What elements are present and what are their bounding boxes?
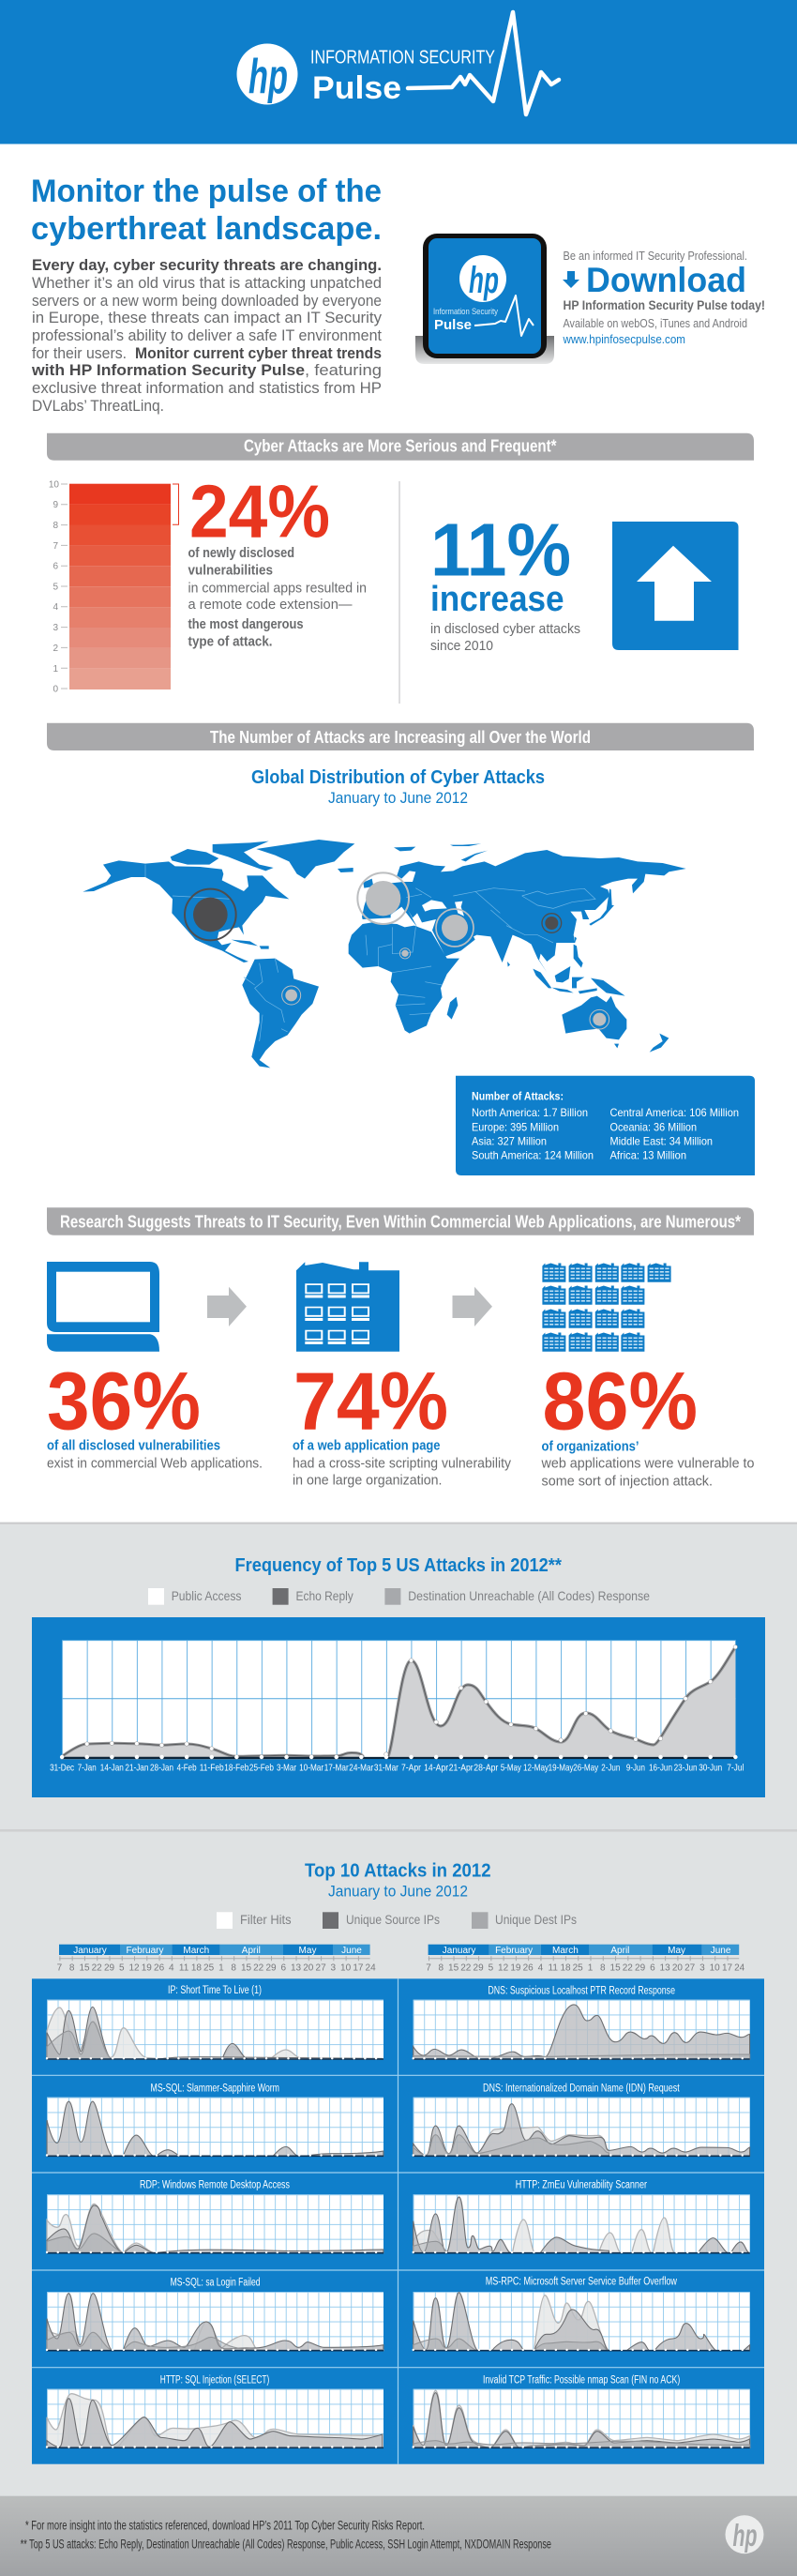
stat: 86 percent: some sort of injection attack. [542,1474,713,1489]
timeline: right column: April [610,1946,629,1956]
chart: HTTP SQL Injection [47,2375,383,2447]
timeline: left column: 5 [119,1963,125,1974]
download call to action [563,250,765,346]
stat: 36 percent: of all disclosed vulnerabilities [47,1439,220,1454]
legend: number of attacks [456,1076,755,1175]
timeline: left column: 24 [366,1963,376,1974]
chart: DNS Suspicious Localhost [414,1986,750,2059]
chart: MS-SQL Slammer-Sapphire Worm: MS-SQL: Slammer-Sapphire Worm [150,2083,279,2094]
stat: 24 percent: 24% [189,469,330,553]
date axis labels: 7-Jan [78,1763,97,1774]
timeline: left column [57,1945,376,1974]
map heading: January to June 2012 [328,789,468,807]
frequency line chart [32,1617,765,1797]
stat: 74 percent: 74% [293,1356,448,1447]
intro text block: Whether it’s an old virus that is attacking unpatched [32,274,382,292]
timeline: left column: April [242,1946,261,1956]
timeline: right column: 15 [448,1963,459,1974]
date axis labels: 21-Apr [449,1763,474,1774]
date axis labels: 3-Mar [277,1763,296,1774]
chart: HTTP ZmEu Vulnerability Scanner [414,2180,750,2253]
chart: Invalid TCP Traffic: Invalid TCP Traffic: Possible nmap Scan (FIN no ACK) [483,2375,680,2387]
date axis labels: 21-Jan [125,1763,149,1774]
top 10 attacks heading: Top 10 Attacks in 2012 [305,1861,491,1882]
top 10 attacks heading [305,1861,491,1901]
marker: South America [282,986,301,1005]
panel: top 10 charts [32,1978,764,2464]
date axis labels: 11-Feb [200,1763,224,1774]
stat: 24 percent: vulnerabilities [188,563,273,579]
stat: 24 percent: a remote code extension— [188,597,353,613]
date axis labels: 30-Jun [699,1763,722,1774]
timeline: left column: 11 [179,1963,189,1974]
stat: 36 percent: exist in commercial Web applications. [47,1457,263,1472]
date axis labels: 17-Mar [324,1763,349,1774]
legend: number of attacks: Number of Attacks: [472,1092,564,1103]
intro text block: for their users. [32,344,127,362]
date axis labels: 7-Jul [727,1763,744,1774]
icon: computer [47,1262,159,1352]
app icon: Pulse [434,317,472,333]
legend: number of attacks: South America: 124 Million [472,1149,594,1162]
arrow [207,1287,247,1326]
app icon [415,234,554,364]
timeline: right column: 17 [722,1963,732,1974]
bar chart: vulnerability severity: 1 [53,664,58,674]
marker: Middle East [436,909,474,947]
timeline: right column: 8 [439,1963,444,1974]
timeline: right column: 27 [684,1963,696,1974]
chart: DNS Suspicious Localhost: DNS: Suspicious Localhost PTR Record Response [488,1986,675,1997]
intro text block: in Europe, these threats can impact an IT Security [32,309,382,326]
timeline: right column: 5 [489,1963,494,1974]
timeline: right column: May [668,1946,685,1956]
timeline: left column: 26 [154,1963,165,1974]
timeline: left column: 12 [128,1963,140,1974]
date axis labels: 12-May [523,1763,549,1774]
intro text block: DVLabs’ ThreatLinq. [32,397,164,415]
Europe, Africa, Asia and Oceania [349,843,686,1053]
brand name: INFORMATION SECURITY [310,48,495,68]
timeline: left column: 29 [104,1963,114,1974]
stat: 86 percent [541,1356,754,1489]
date axis labels: 14-Apr [424,1763,449,1774]
frequency chart legend: Echo Reply [296,1588,353,1603]
date axis labels: 31-Mar [374,1763,398,1774]
map heading: Global Distribution of Cyber Attacks [251,767,545,788]
legend: number of attacks: Asia: 327 Million [472,1135,547,1148]
date axis labels: 2-Jun [601,1763,620,1774]
bar chart: vulnerability severity: 0 [53,685,58,694]
marker: Oceania [590,1009,609,1029]
timeline: left column: 7 [57,1963,63,1974]
timeline: left column: 22 [92,1963,102,1974]
timeline: left column: 4 [169,1963,174,1974]
stat: 86 percent: 86% [542,1356,698,1447]
date axis labels: 31-Dec [50,1763,74,1774]
timeline: left column: 19 [142,1963,152,1974]
timeline: right column: 22 [623,1963,633,1974]
chart: RDP Windows Remote Desktop Access: RDP: Windows Remote Desktop Access [140,2180,290,2191]
intro text block [31,256,382,415]
download call to action: Available on webOS, iTunes and Android [563,317,747,330]
header band [0,0,797,144]
date axis labels: 28-Jan [150,1763,173,1774]
timeline: right column: 25 [573,1963,583,1974]
download call to action: HP Information Security Pulse today! [563,298,765,312]
timeline: right column: 12 [498,1963,509,1974]
timeline: left column: 25 [203,1963,215,1974]
timeline: left column: 22 [253,1963,264,1974]
timeline: left column: May [299,1946,316,1956]
timeline: left column: January [73,1946,107,1956]
app icon: hp [469,260,499,301]
chart: HTTP ZmEu Vulnerability Scanner: HTTP: ZmEu Vulnerability Scanner [516,2180,647,2191]
date axis labels: 10-Mar [299,1763,323,1774]
timeline: left column: 15 [241,1963,251,1974]
chart: MS-SQL sa Login Failed [47,2278,383,2351]
marker: Europe [357,872,409,924]
timeline: left column: 29 [265,1963,277,1974]
stat: 86 percent: web applications were vulnerable to [541,1457,754,1472]
legend: number of attacks: Central America: 106 Million [609,1106,739,1119]
timeline: left column: 17 [353,1963,364,1974]
timeline: right column: 1 [588,1963,594,1974]
timeline: right column: 29 [635,1963,646,1974]
timeline: left column: 13 [291,1963,301,1974]
chart: MS-SQL Slammer-Sapphire Worm [47,2083,383,2156]
section bar: attacks over the world [47,723,754,750]
marker: Asia [542,914,562,932]
timeline: left column: February [126,1946,164,1956]
footnote: ** Top 5 US attacks: Echo Reply, Destination Unreachable (All Codes) Response, Public Access, SSH Login Attempt, NXDOMAIN Response [21,2538,551,2552]
footer [0,2496,797,2576]
app icon: Information Security [433,307,498,317]
intro text block: professional’s ability to deliver a safe IT environment [32,326,382,344]
data series [62,1647,735,1758]
chart: HTTP SQL Injection: HTTP: SQL Injection (SELECT) [160,2375,269,2387]
timeline: right column: 18 [560,1963,571,1974]
bar chart: vulnerability severity: 8 [53,521,58,531]
date axis labels: 7-Apr [401,1763,421,1774]
timeline: left column: 27 [316,1963,326,1974]
section bar: serious and frequent [47,433,754,461]
date axis labels: 26-May [573,1763,599,1774]
frequency chart heading: Frequency of Top 5 US Attacks in 2012** [234,1555,562,1576]
timeline: right column: 3 [699,1963,705,1974]
timeline: right column: 8 [600,1963,606,1974]
date axis labels: 19-May [549,1763,574,1774]
timeline: left column: 18 [191,1963,202,1974]
date axis labels: 16-Jun [649,1763,672,1774]
timeline: left column: 15 [79,1963,90,1974]
pulse line [408,12,559,114]
chart: DNS Internationalized Domain Name [414,2083,750,2156]
stat: 36 percent: 36% [47,1356,201,1447]
chart: DNS Internationalized Domain Name: DNS: Internationalized Domain Name (IDN) Request [483,2083,680,2094]
timeline: left column: March [183,1946,209,1956]
timeline: right column [426,1945,745,1974]
bar chart: vulnerability severity: 5 [53,582,58,593]
intro text block: , featuring [305,361,382,379]
timeline: left column: 1 [218,1963,224,1974]
bar chart: vulnerability severity: 7 [53,541,58,552]
legend: number of attacks: Oceania: 36 Million [609,1120,697,1133]
bar chart: vulnerability severity [49,480,178,694]
chart: IP Short Time To Live [47,1985,383,2059]
top 10 legend: Unique Source IPs [346,1912,440,1927]
top 10 legend: Unique Dest IPs [495,1912,577,1927]
top 10 legend: Filter Hits [240,1912,292,1927]
stat: 11 percent increase: in disclosed cyber attacks [430,621,580,637]
heading [31,174,382,247]
bar chart: vulnerability severity: 10 [49,480,59,490]
arrow [452,1287,492,1326]
download call to action: Be an informed IT Security Professional. [563,250,747,263]
download call to action: Download [586,261,746,299]
timeline: right column: 7 [426,1963,431,1974]
timeline: left column: 20 [303,1963,314,1974]
section bar: commercial web applications [47,1207,754,1235]
bar chart: vulnerability severity: 6 [53,561,58,572]
timeline: right column: February [495,1946,533,1956]
timeline: right column: 24 [734,1963,745,1974]
stat: 74 percent: in one large organization. [293,1474,443,1489]
stat: 24 percent: in commercial apps resulted in [188,581,367,597]
stat: 11 percent increase: since 2010 [430,638,493,654]
timeline: right column: 10 [710,1963,720,1974]
bar chart: vulnerability severity: 2 [53,644,58,654]
intro text block: Monitor current cyber threat trends [135,344,382,362]
icon: office building [296,1262,399,1352]
marker: North America [185,889,236,940]
stat: 11 percent increase: 11% [430,508,571,591]
icon: up arrow box [612,522,739,650]
chart: MS-RPC Microsoft Server Service Buffer Overflow [414,2276,750,2351]
date axis labels: 23-Jun [674,1763,698,1774]
stat: 86 percent: of organizations’ [542,1439,639,1454]
marker: Africa [399,948,411,959]
intro text block: Every day, cyber security threats are changing. [32,256,382,274]
chart: MS-SQL sa Login Failed: MS-SQL: sa Login Failed [171,2278,261,2289]
icon: HP logo [236,43,298,105]
date axis labels: 18-Feb [224,1763,248,1774]
heading: cyberthreat landscape. [31,211,382,247]
Americas and Greenland [83,840,354,1068]
panel: grey chart background [0,1523,797,2498]
timeline: right column: June [711,1946,731,1956]
stat: 24 percent: the most dangerous [188,616,304,632]
stat: 11 percent increase: increase [430,580,564,619]
icon: HP logo [726,2515,763,2553]
brand name: Pulse: Pulse [312,70,401,106]
footnote: * For more insight into the statistics referenced, download HP’s 2011 Top Cyber Security Risks Report. [25,2519,425,2533]
top 10 legend [217,1912,577,1929]
date axis labels: 28-Apr [474,1763,499,1774]
chart: RDP Windows Remote Desktop Access [47,2180,383,2253]
heading: Monitor the pulse of the [31,174,382,209]
timeline: right column: 13 [660,1963,670,1974]
legend: number of attacks: Europe: 395 Million [472,1120,559,1133]
stat: 11 percent increase [430,508,580,654]
bar chart: vulnerability severity: 3 [53,623,58,633]
legend: number of attacks: North America: 1.7 Billion [472,1106,588,1119]
timeline: right column: January [443,1946,475,1956]
stat: 24 percent: type of attack. [188,633,272,649]
data points [84,1645,737,1756]
date axis labels: 5-May [501,1763,521,1774]
date axis labels [50,1763,744,1774]
timeline: left column: 10 [340,1963,352,1974]
icon: download arrow [563,271,579,288]
date axis labels: 9-Jun [626,1763,645,1774]
legend: number of attacks: Africa: 13 Million [609,1149,686,1162]
frequency chart legend [148,1588,650,1605]
stat: 24 percent: of newly disclosed [188,545,294,561]
stat: 74 percent: of a web application page [293,1439,441,1454]
timeline: right column: 15 [610,1963,621,1974]
legend: number of attacks: Middle East: 34 Million [609,1135,713,1148]
timeline: left column: June [341,1946,362,1956]
date axis labels: 25-Feb [249,1763,274,1774]
timeline: right column: 22 [460,1963,472,1974]
timeline: left column: 8 [69,1963,75,1974]
chart: IP Short Time To Live: IP: Short Time To Live (1) [168,1985,262,1996]
top 10 attacks heading: January to June 2012 [328,1883,468,1901]
stat: 24 percent [188,469,367,649]
bar chart: vulnerability severity: 9 [53,500,58,510]
timeline: right column: 4 [538,1963,544,1974]
timeline: right column: 26 [523,1963,534,1974]
map heading [251,767,545,807]
bar chart: vulnerability severity: 4 [53,602,58,613]
frequency chart legend: Destination Unreachable (All Codes) Response [408,1588,650,1603]
icon: grid of buildings [542,1263,671,1352]
stat: 74 percent: had a cross-site scripting vulnerability [293,1457,512,1472]
intro text block: servers or a new worm being downloaded by everyone [32,292,382,310]
icon: HP logo: hp [733,2518,758,2553]
chart: Invalid TCP Traffic [414,2375,750,2447]
frequency chart legend: Public Access [172,1588,242,1603]
section bar: attacks over the world: The Number of Attacks are Increasing all Over the World [210,728,591,747]
timeline: left column: 8 [231,1963,236,1974]
date axis labels: 4-Feb [177,1763,197,1774]
timeline: right column: March [552,1946,579,1956]
timeline: left column: 6 [281,1963,287,1974]
intro text block: exclusive threat information and statistics from HP [32,379,382,397]
download call to action: www.hpinfosecpulse.com [563,333,685,346]
timeline: right column: 29 [474,1963,484,1974]
timeline: right column: 6 [650,1963,655,1974]
timeline: right column: 19 [510,1963,521,1974]
section bar: serious and frequent: Cyber Attacks are More Serious and Frequent* [244,437,557,456]
timeline: right column: 11 [549,1963,558,1974]
intro text block: with HP Information Security Pulse [31,361,305,379]
icon: HP logo: hp [248,50,288,104]
timeline: right column: 20 [672,1963,683,1974]
date axis labels: 14-Jan [100,1763,124,1774]
date axis labels: 24-Mar [349,1763,374,1774]
timeline: left column: 3 [331,1963,337,1974]
stat: 36 percent [47,1356,263,1472]
chart: MS-RPC Microsoft Server Service Buffer Overflow: MS-RPC: Microsoft Server Service Buffer Overflow [486,2276,678,2287]
stat: 74 percent [293,1356,512,1489]
world map [83,840,686,1068]
